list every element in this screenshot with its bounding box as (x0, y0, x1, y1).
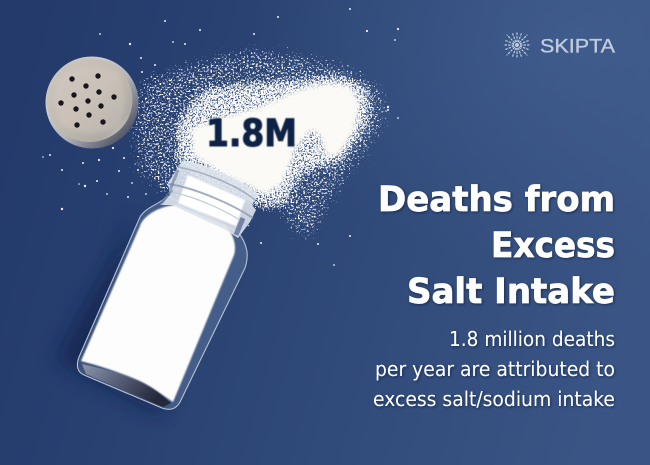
description: excess salt/sodium intake (373, 387, 615, 411)
description: 1.8 million deaths (449, 327, 615, 351)
title: Excess (491, 226, 615, 266)
jar rim (178, 167, 255, 200)
jar glass body (77, 196, 247, 409)
medium salt drift (172, 70, 374, 214)
wordmark: SKIPTA (540, 36, 615, 58)
salt fill (81, 205, 235, 402)
title (378, 180, 615, 312)
title: Salt Intake (407, 272, 615, 312)
scattered salt grains (128, 42, 392, 245)
logo: SKIPTA (503, 31, 615, 59)
dense salt heap (192, 83, 360, 194)
stat: 1.8M: 1.8M (206, 112, 297, 155)
jar base (82, 364, 171, 407)
icon: shaker lid (46, 56, 138, 148)
jar neck (160, 160, 258, 238)
title: Deaths from (378, 180, 615, 220)
lid holes (58, 73, 117, 128)
description (373, 327, 615, 411)
description: per year are attributed to (375, 357, 615, 381)
jar shadow (55, 215, 170, 415)
icon: spilled salt jar (55, 160, 258, 415)
spilled salt (42, 8, 399, 266)
icon: starburst (503, 31, 531, 59)
loose grains (42, 8, 399, 266)
